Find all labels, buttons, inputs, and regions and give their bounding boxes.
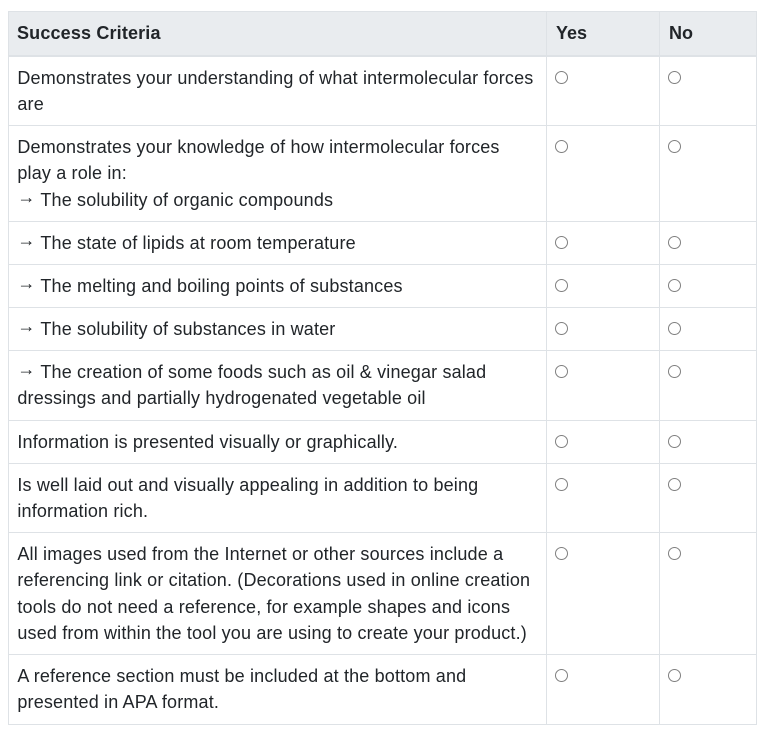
criterion: understanding: Demonstrates your understanding of what intermolecular forces: [17, 68, 533, 88]
criterion: image references: [9, 533, 756, 655]
criterion: solubility in water: [9, 308, 756, 351]
criterion: foods: → The creation of some foods such as oil & vinegar salad: [17, 359, 486, 382]
criterion: knowledge: Demonstrates your knowledge of how intermolecular forces: [17, 137, 500, 157]
table header row: Success Criteria: [17, 23, 161, 43]
table header row: Yes: [556, 23, 587, 43]
criterion: understanding: are: [17, 94, 44, 114]
criterion: visual presentation: [9, 421, 756, 464]
criterion: melting and boiling points: → The melting and boiling points of substances: [17, 273, 403, 296]
criterion: layout: [9, 464, 756, 533]
criterion: image references: referencing link or citation. (Decorations used in online creation: [17, 570, 530, 590]
criterion: foods: [9, 351, 756, 421]
criterion: visual presentation: Information is presented visually or graphically.: [17, 432, 398, 452]
criterion: knowledge: → The solubility of organic compounds: [17, 187, 333, 210]
criterion: understanding: [9, 57, 756, 126]
criterion: image references: tools do not need a reference, for example shapes and icons: [17, 597, 510, 617]
criterion: reference section: A reference section must be included at the bottom and: [17, 666, 466, 686]
criterion: knowledge: [9, 126, 756, 222]
criterion: solubility in water: → The solubility of substances in water: [17, 316, 335, 339]
criterion: reference section: presented in APA format.: [17, 692, 219, 712]
criterion: image references: All images used from the Internet or other sources include a: [17, 544, 503, 564]
criterion: lipids: → The state of lipids at room temperature: [17, 230, 356, 253]
criterion: foods: dressings and partially hydrogenated vegetable oil: [17, 388, 426, 408]
criterion: reference section: [17, 666, 681, 712]
criterion: lipids: [9, 222, 756, 265]
criterion: image references: used from within the tool you are using to create your product.): [17, 623, 527, 643]
criterion: layout: Is well laid out and visually appealing in addition to being: [17, 475, 478, 495]
criterion: melting and boiling points: [9, 265, 756, 308]
table header row: [9, 12, 756, 57]
criterion: layout: information rich.: [17, 501, 148, 521]
table header row: No: [669, 23, 693, 43]
criterion: knowledge: play a role in:: [17, 163, 127, 183]
